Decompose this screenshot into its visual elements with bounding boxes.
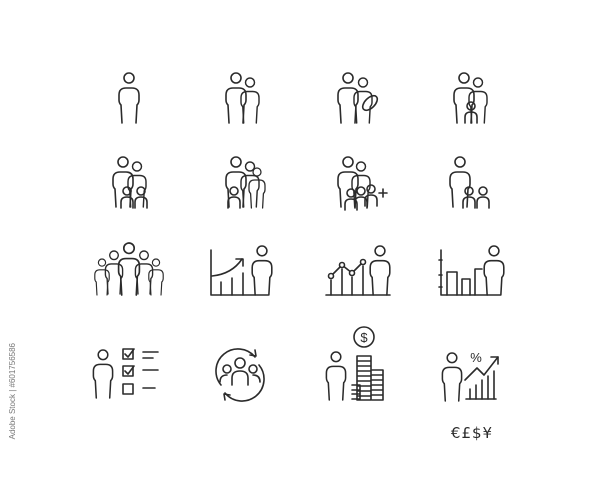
icon: couple with child	[454, 73, 487, 123]
icon: line chart person	[326, 246, 390, 295]
icon: checklist person	[93, 349, 158, 398]
text: dollar in coin: $	[360, 330, 368, 345]
icon: family with teen	[226, 157, 265, 208]
icon: family two kids	[113, 157, 147, 208]
text: stock id vertical: Adobe Stock | #601756586	[8, 342, 17, 439]
text: currency symbols: €£$¥	[451, 424, 493, 442]
icon: crowd	[95, 243, 163, 295]
icon: money stack person	[326, 327, 383, 400]
icon: couple with baby	[338, 73, 380, 123]
icon: large family	[338, 157, 387, 210]
icon: team cycle	[216, 349, 264, 401]
icon: single parent	[450, 157, 489, 208]
icon: finance growth person	[442, 353, 498, 401]
icon: couple	[226, 73, 259, 123]
icon: bar chart person	[439, 246, 504, 295]
text: percent sign: %	[470, 350, 482, 365]
icon: growth chart person	[211, 246, 272, 295]
icon: single person	[119, 73, 139, 123]
